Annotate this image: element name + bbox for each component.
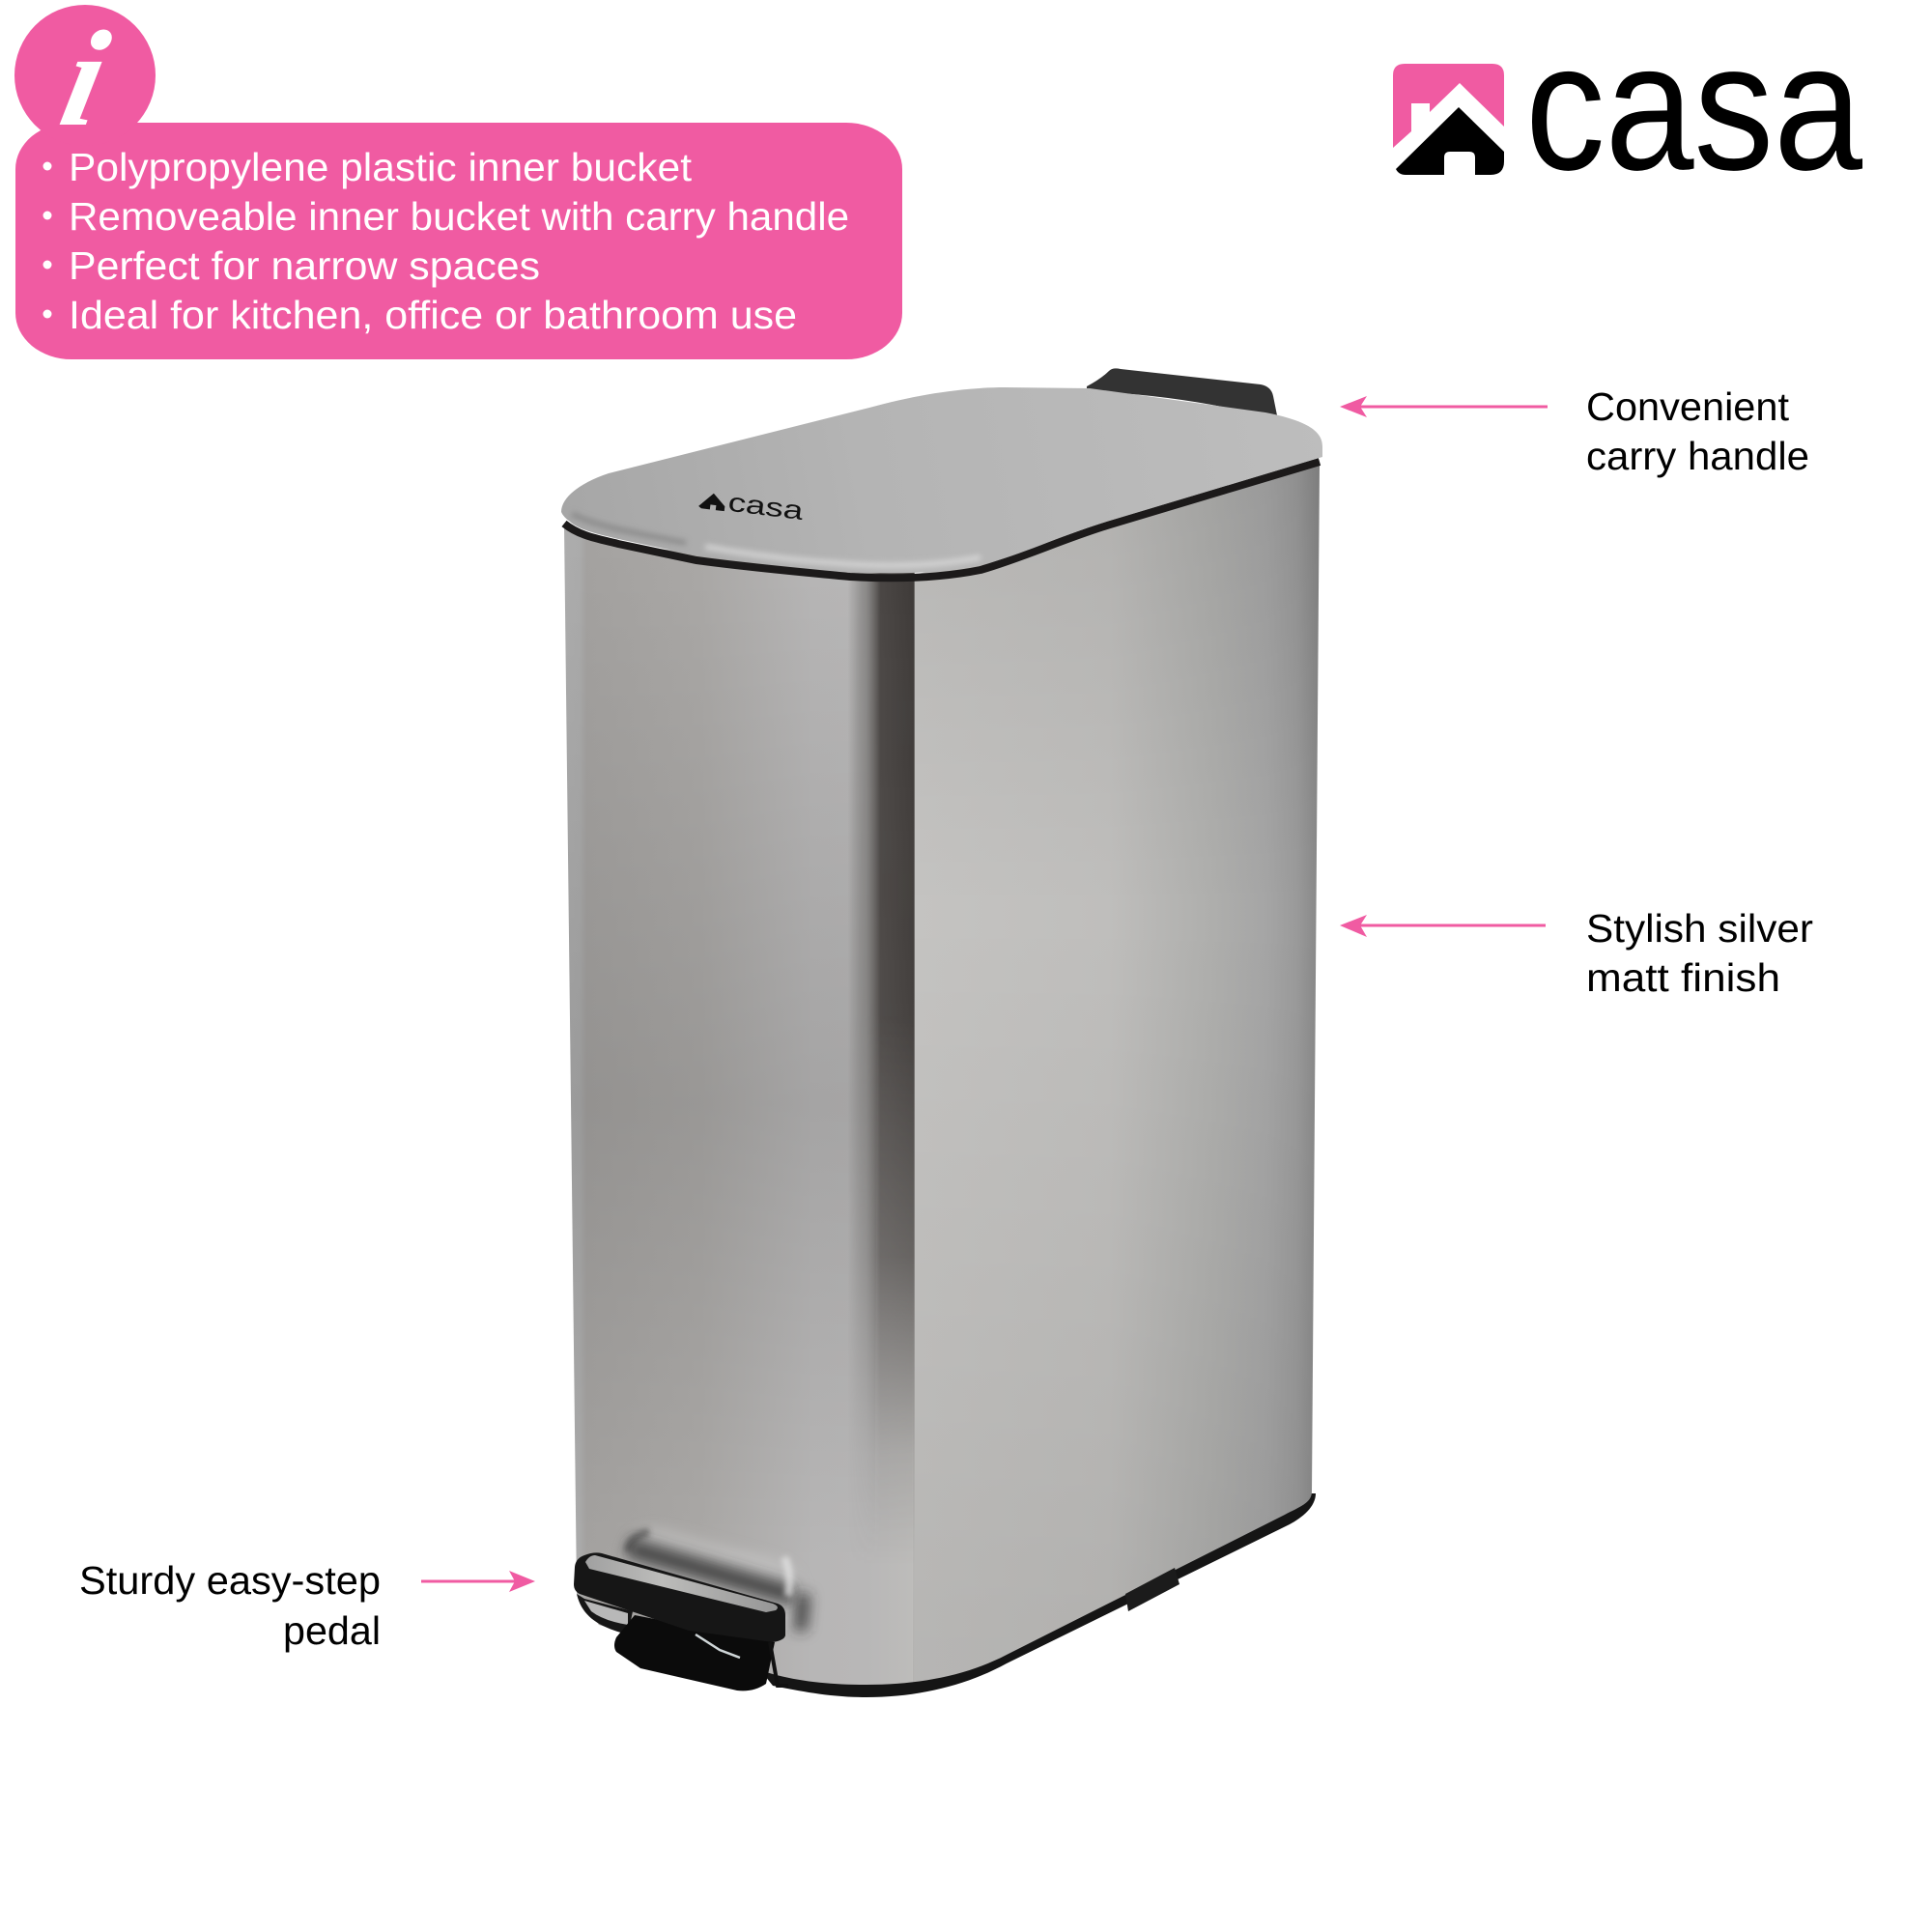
arrow: carry handle bbox=[1340, 396, 1548, 417]
logo: casa: casa bbox=[1525, 5, 1862, 208]
label: carry handle: carry handle bbox=[1586, 434, 1809, 478]
base rim bbox=[753, 1493, 1316, 1697]
body corner shadow bbox=[850, 572, 915, 1523]
label: silver finish bbox=[1586, 906, 1813, 1000]
bullet list bbox=[43, 145, 849, 337]
label: pedal: Sturdy easy-step bbox=[79, 1558, 381, 1603]
base clip bbox=[1125, 1568, 1179, 1611]
logo: casa bbox=[1393, 5, 1862, 208]
icon: info circle bbox=[14, 3, 156, 156]
bullet list: Removeable inner bucket with carry handle bbox=[69, 194, 849, 239]
lid logo: casa bbox=[726, 488, 806, 526]
gasket bbox=[564, 462, 1320, 578]
bullet list: Perfect for narrow spaces bbox=[69, 243, 540, 288]
product: pedal bin bbox=[561, 368, 1322, 1697]
pedal recess shadow bbox=[618, 1529, 804, 1631]
icon: info circle: i bbox=[49, 3, 120, 156]
icon: house bbox=[1393, 64, 1504, 175]
label: pedal bbox=[79, 1558, 381, 1653]
label: silver finish: Stylish silver bbox=[1586, 906, 1813, 951]
bullet list: Ideal for kitchen, office or bathroom use bbox=[69, 293, 797, 337]
callout background bbox=[15, 123, 902, 359]
label: carry handle bbox=[1586, 384, 1809, 478]
bullet list: Polypropylene plastic inner bucket bbox=[69, 145, 693, 189]
label: carry handle: Convenient bbox=[1586, 384, 1790, 429]
label: silver finish: matt finish bbox=[1586, 955, 1780, 1000]
lid logo bbox=[697, 484, 806, 526]
arrow: silver finish bbox=[1340, 915, 1546, 937]
lid bbox=[561, 387, 1322, 573]
arrow: pedal bbox=[421, 1571, 535, 1592]
label: pedal: pedal bbox=[283, 1608, 381, 1653]
panel: product info bbox=[14, 3, 902, 359]
bin body bbox=[564, 462, 1320, 1685]
pedal bbox=[574, 1552, 788, 1690]
carry handle bbox=[1087, 368, 1277, 415]
